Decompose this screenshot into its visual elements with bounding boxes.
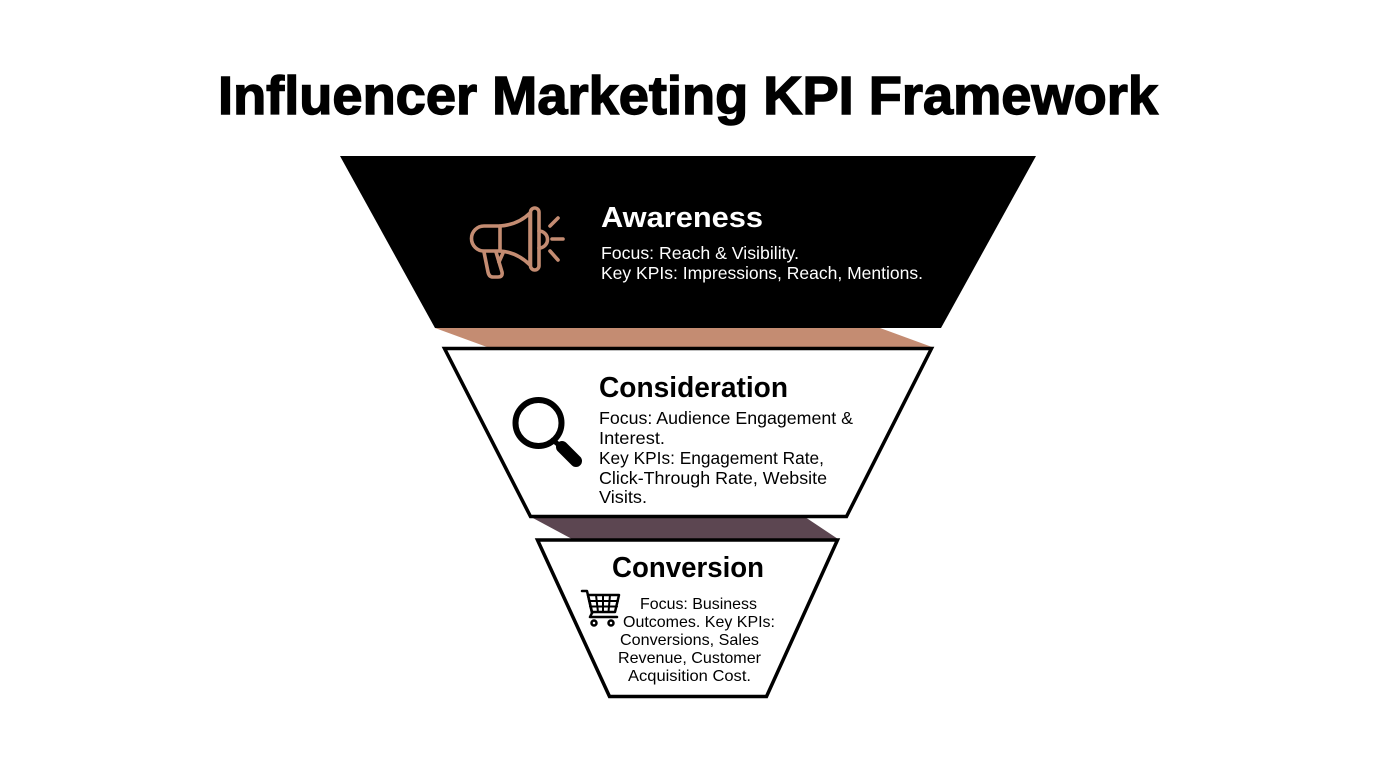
panel: awareness [340,156,1036,328]
consideration text: Visits. [599,487,647,507]
icon: megaphone [471,208,563,277]
funnel connector: copper band [435,328,932,347]
consideration text: Key KPIs: Engagement Rate, [599,448,824,468]
awareness trapezoid [340,156,1036,328]
awareness text: Focus: Reach & Visibility. [601,243,799,263]
conversion text [618,596,775,685]
awareness text [601,243,923,283]
consideration text: Interest. [599,428,665,448]
panel: consideration [444,348,932,516]
conversion text: Focus: Business [640,596,757,613]
consideration text: Focus: Audience Engagement & [599,408,853,428]
icon: magnifying glass [516,400,576,461]
awareness heading: Awareness [601,202,763,234]
awareness text: Key KPIs: Impressions, Reach, Mentions. [601,263,923,283]
conversion trapezoid [538,540,838,696]
conversion text: Revenue, Customer [618,650,762,667]
panel: conversion [538,540,838,696]
conversion text: Acquisition Cost. [628,668,751,685]
conversion heading: Conversion [612,552,764,584]
icon: shopping cart [582,591,619,626]
consideration text [599,408,853,507]
conversion text: Outcomes. Key KPIs: [623,614,775,631]
funnel connector: plum band [531,517,838,539]
conversion text: Conversions, Sales [620,632,759,649]
title: Influencer Marketing KPI Framework [218,66,1159,126]
consideration heading: Consideration [599,372,788,404]
consideration text: Click-Through Rate, Website [599,468,827,488]
consideration trapezoid [444,348,932,516]
